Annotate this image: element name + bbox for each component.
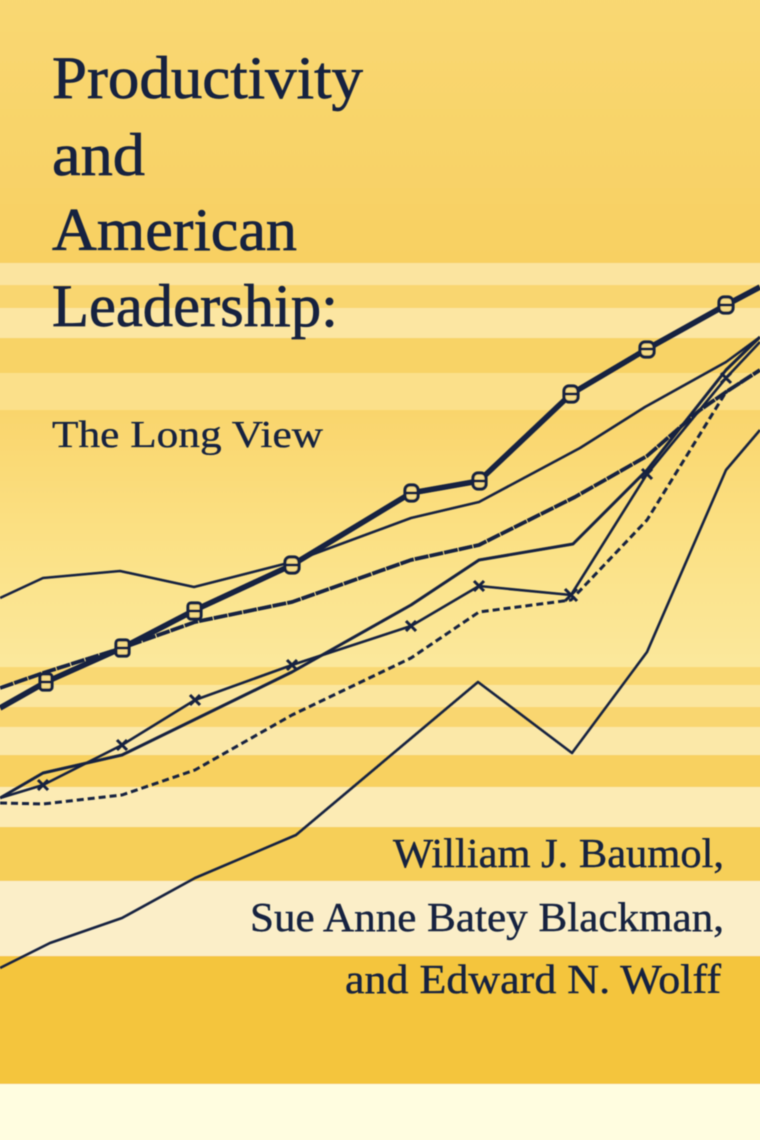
subtitle: The Long View [52, 414, 324, 456]
title: Leadership: [52, 273, 338, 339]
line: lowest series [0, 430, 760, 968]
title: and [52, 122, 145, 188]
authors: William J. Baumol, [393, 830, 724, 876]
line: cross-marked series [0, 342, 760, 798]
line: thin upper series [0, 337, 760, 598]
title [52, 45, 363, 339]
line: plain series [0, 337, 760, 798]
line: wavy medium series [0, 370, 760, 688]
authors [250, 830, 724, 1002]
authors: and Edward N. Wolff [345, 956, 721, 1002]
line chart [0, 287, 760, 968]
title: Productivity [52, 45, 363, 111]
line: dashed series [0, 370, 760, 804]
title: American [52, 197, 297, 263]
line: thick square-marked series [0, 287, 760, 708]
authors: Sue Anne Batey Blackman, [250, 894, 724, 940]
